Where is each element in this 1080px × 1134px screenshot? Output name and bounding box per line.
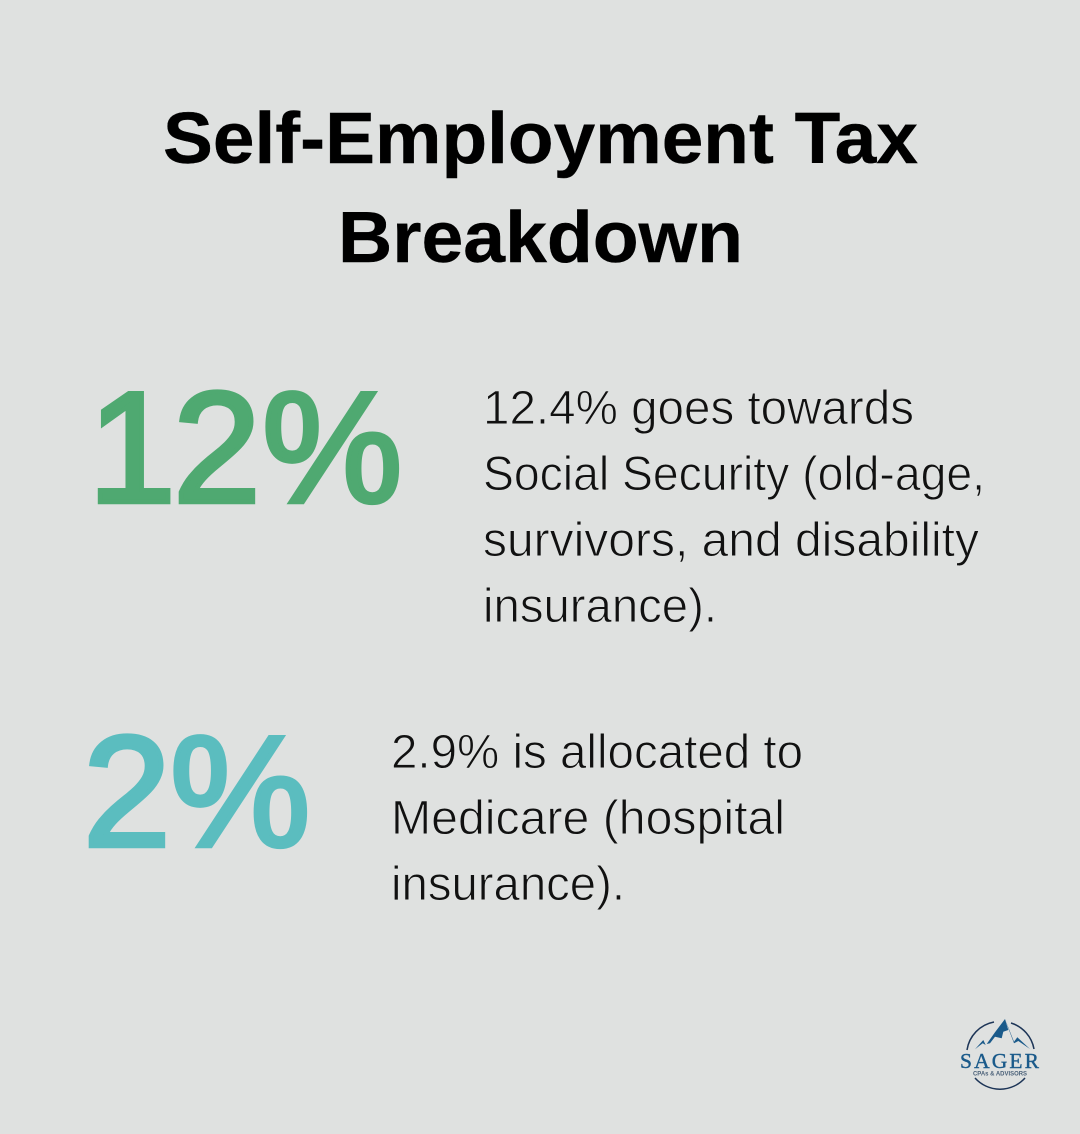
logo wordmark: SAGER	[960, 1049, 1040, 1073]
title	[163, 99, 918, 278]
text block: Social Security description: insurance).	[483, 580, 717, 633]
text block: Medicare description: insurance).	[391, 858, 625, 911]
title: Breakdown	[338, 198, 743, 278]
text block: Medicare description	[391, 726, 803, 911]
text block: Social Security description: survivors, and disability	[483, 514, 979, 567]
stat: 2%: 2%	[83, 704, 310, 880]
text block: Social Security description	[483, 382, 985, 633]
text block: Social Security description: 12.4% goes towards	[483, 382, 914, 435]
title: Self-Employment Tax	[163, 99, 918, 179]
text block: Social Security description: Social Security (old-age,	[483, 448, 985, 501]
icon: logo ring	[967, 1022, 1034, 1089]
logo: Sager CPAs & Advisors	[960, 1019, 1040, 1089]
stat: 12%: 12%	[88, 360, 402, 536]
text block: Medicare description: 2.9% is allocated to	[391, 726, 803, 779]
icon: mountain	[975, 1019, 1030, 1049]
logo tagline: CPAs & ADVISORS	[973, 1072, 1027, 1078]
text block: Medicare description: Medicare (hospital	[391, 792, 785, 845]
